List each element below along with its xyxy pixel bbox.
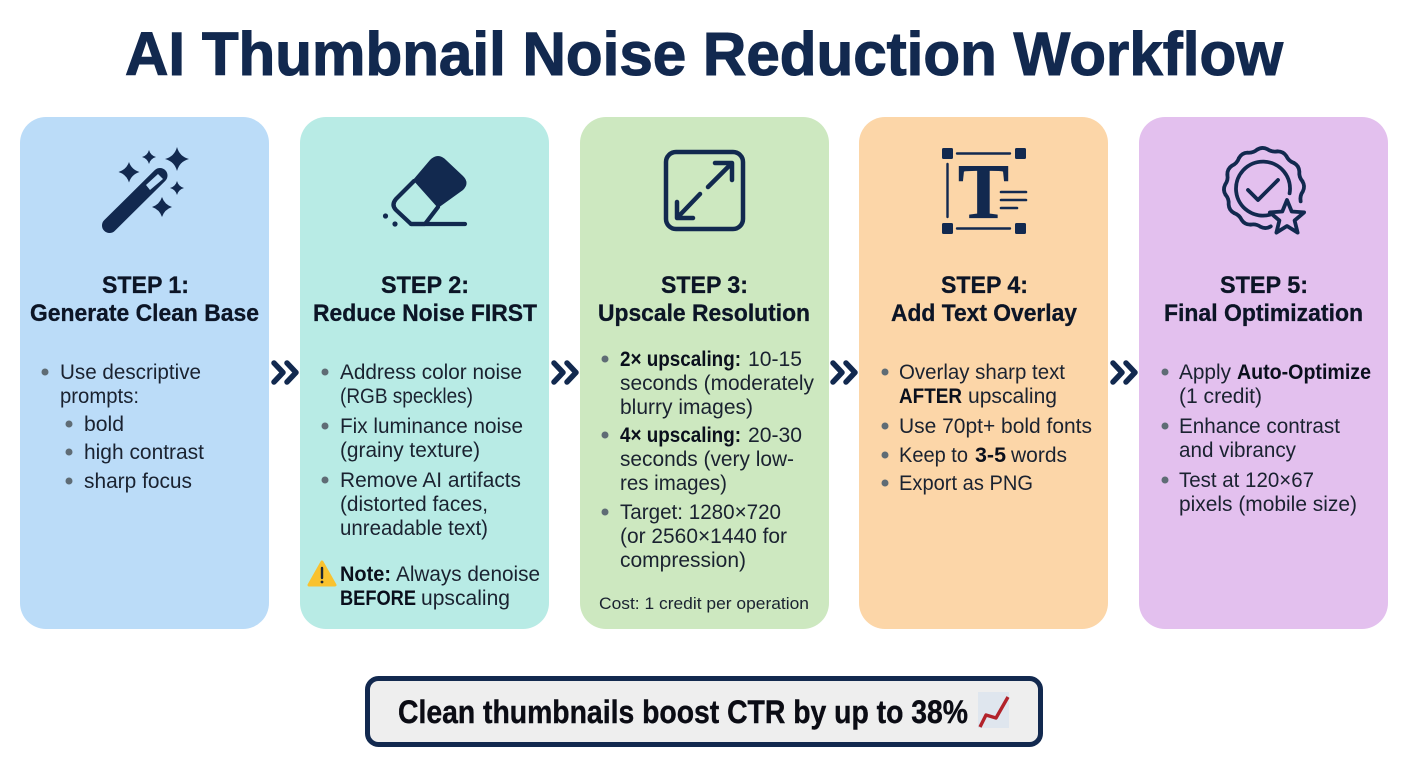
panel: step 3 upscale resolution: [580, 117, 829, 629]
bullet list: step 5: Test at 120×67: [1179, 469, 1314, 492]
bullet list: step 2: unreadable text): [340, 517, 488, 540]
bullet list: step 3: 20-30: [748, 424, 802, 447]
bullet list: step 2: Address color noise: [340, 361, 522, 384]
bullet list: step 1: sharp focus: [84, 470, 192, 493]
bullet list: step 3: blurry images): [620, 396, 753, 419]
note: denoise before upscaling: BEFORE: [340, 587, 416, 610]
bullet list: step 5: (1 credit): [1179, 385, 1262, 408]
bullet list: step 4: upscaling: [968, 385, 1057, 408]
note: denoise before upscaling: upscaling: [421, 587, 510, 610]
arrow: step 4 to 5: [1113, 363, 1135, 382]
cost note: Cost: 1 credit per operation: [599, 595, 809, 613]
callout: CTR boost: [368, 678, 1040, 744]
bullet list: step 3: [602, 348, 814, 572]
bullet list: step 5: pixels (mobile size): [1179, 493, 1357, 516]
heading: step 3: [598, 272, 810, 327]
bullet list: step 5: [1162, 361, 1371, 516]
bullet list: step 3: 4× upscaling:: [620, 424, 741, 447]
bullet list: step 1: Use descriptive: [60, 361, 201, 384]
bullet list: step 2: (distorted faces,: [340, 493, 488, 516]
bullet list: step 5: Auto-Optimize: [1237, 361, 1371, 384]
panel: step 5 final optimization: [1139, 117, 1388, 629]
heading: step 1: STEP 1:: [102, 272, 189, 299]
bullet list: step 3: (or 2560×1440 for: [620, 525, 787, 548]
bullet list: step 4: 3-5: [975, 444, 1006, 467]
icon: text frame: [942, 148, 1026, 235]
bullet list: step 3: seconds (very low-: [620, 448, 794, 471]
arrow: step 3 to 4: [833, 363, 855, 382]
note: denoise before upscaling: Always denoise: [396, 563, 540, 586]
bullet list: step 4: Overlay sharp text: [899, 361, 1065, 384]
icon: quality badge with star: [1221, 145, 1307, 233]
bullet list: step 3: Target: 1280×720: [620, 501, 781, 524]
panel: step 4 add text overlay: [859, 117, 1108, 629]
bullet list: step 2: Remove AI artifacts: [340, 469, 521, 492]
panel: step 2 reduce noise first: [300, 117, 549, 629]
heading: step 5: STEP 5:: [1220, 272, 1308, 299]
arrow: step 1 to 2: [274, 363, 296, 382]
bullet list: step 3: 10-15: [748, 348, 802, 371]
bullet list: step 4: Keep to: [899, 444, 968, 467]
bullet list: step 3: compression): [620, 549, 746, 572]
icon: rising chart: [978, 692, 1009, 728]
bullet list: step 4: Export as PNG: [899, 472, 1033, 495]
panel: step 1 generate clean base: [20, 117, 269, 629]
bullet list: step 1: bold: [84, 413, 124, 436]
title: AI Thumbnail Noise Reduction Workflow: [125, 20, 1284, 88]
bullet list: step 2: (grainy texture): [340, 439, 480, 462]
heading: step 1: [30, 272, 259, 327]
heading: step 1: Generate Clean Base: [30, 300, 259, 327]
heading: step 4: [891, 272, 1078, 327]
note: denoise before upscaling: Note:: [340, 563, 391, 586]
bullet list: step 3: 2× upscaling:: [620, 348, 741, 371]
bullet list: step 1: prompts:: [60, 385, 139, 408]
heading: step 2: [313, 272, 537, 327]
heading: step 4: STEP 4:: [941, 272, 1028, 299]
note: denoise before upscaling: [340, 563, 540, 610]
callout: CTR boost: Clean thumbnails boost CTR by up to 38%: [398, 694, 968, 730]
bullet list: step 2: [322, 361, 523, 540]
bullet list: step 5: Apply: [1179, 361, 1231, 384]
bullet list: step 5: and vibrancy: [1179, 439, 1296, 462]
icon: magic wand: [110, 147, 189, 226]
heading: step 2: STEP 2:: [381, 272, 469, 299]
bullet list: step 4: AFTER: [899, 385, 962, 408]
heading: step 3: Upscale Resolution: [598, 300, 810, 327]
bullet list: step 4: [882, 361, 1092, 495]
bullet list: step 4: words: [1010, 444, 1067, 467]
bullet list: step 2: (RGB speckles): [340, 385, 473, 408]
heading: step 5: [1164, 272, 1363, 327]
bullet list: step 3: seconds (moderately: [620, 372, 814, 395]
bullet list: step 2: Fix luminance noise: [340, 415, 523, 438]
icon: expand arrows: [666, 152, 743, 229]
bullet list: step 5: Enhance contrast: [1179, 415, 1340, 438]
icon: eraser: [383, 156, 466, 227]
heading: step 3: STEP 3:: [661, 272, 748, 299]
icon: warning triangle: [309, 562, 335, 585]
heading: step 4: Add Text Overlay: [891, 300, 1078, 327]
heading: step 5: Final Optimization: [1164, 300, 1363, 327]
icon: text frame: T: [958, 148, 1009, 235]
bullet list: step 4: Use 70pt+ bold fonts: [899, 415, 1092, 438]
bullet list: step 1: high contrast: [84, 441, 204, 464]
bullet list: step 3: res images): [620, 472, 727, 495]
heading: step 2: Reduce Noise FIRST: [313, 300, 537, 327]
arrow: step 2 to 3: [554, 363, 576, 382]
bullet list: step 1: [42, 361, 204, 493]
